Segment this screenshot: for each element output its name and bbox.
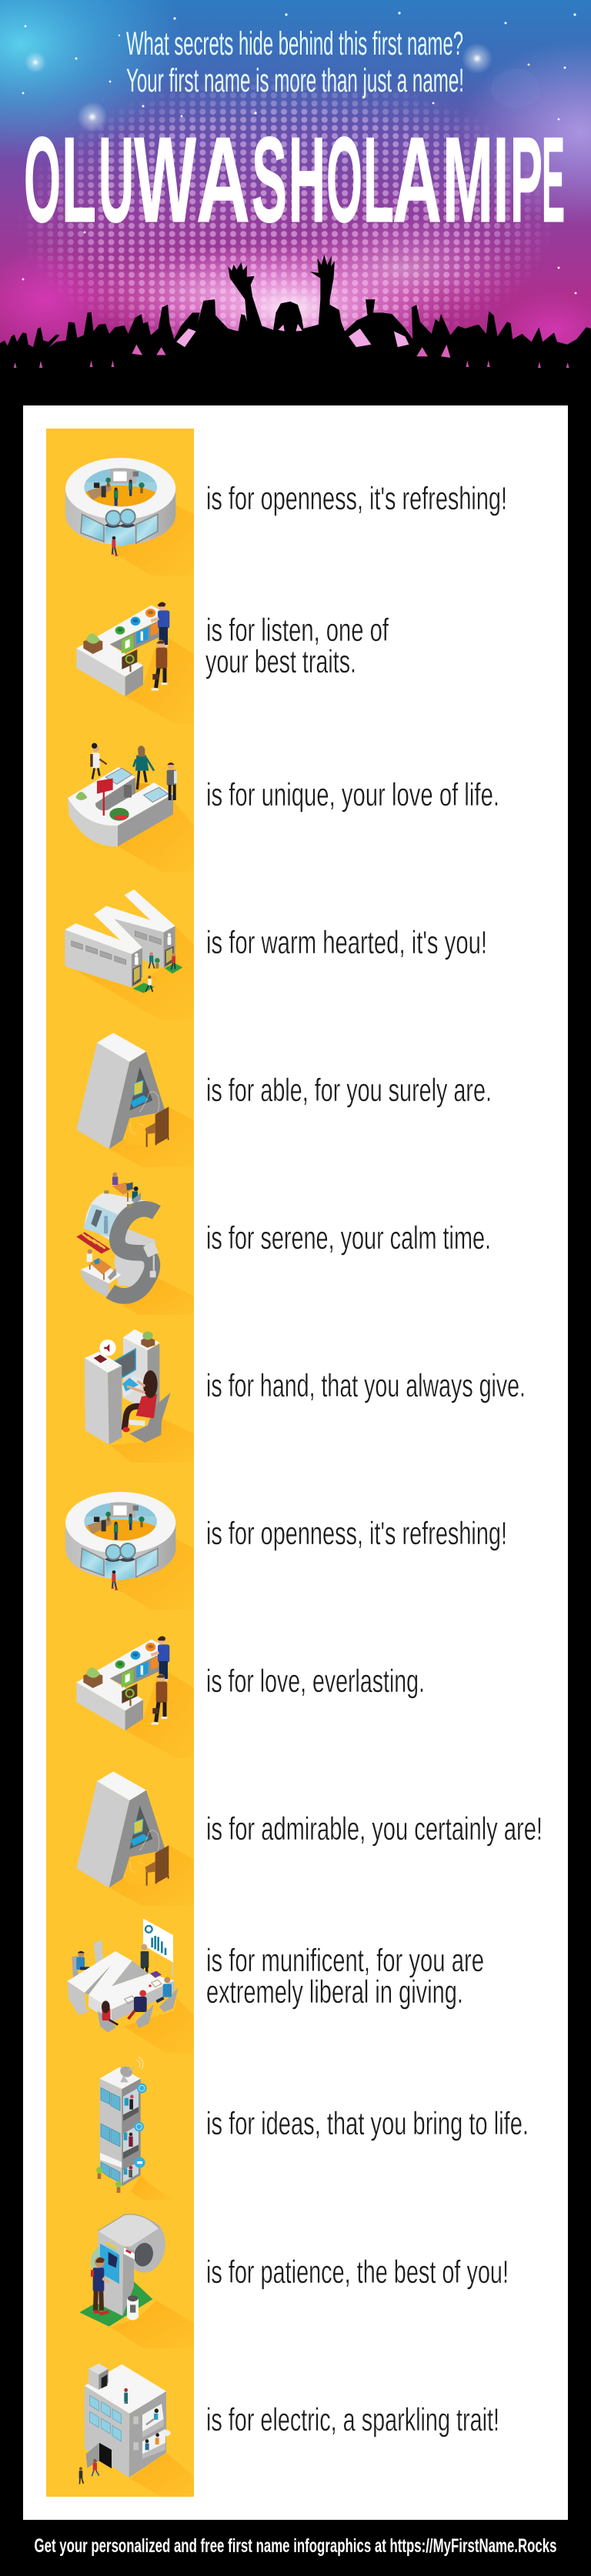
title: first name: H (289, 112, 326, 248)
icon: letter A with chair (76, 1033, 194, 1167)
text: listen (205, 612, 389, 679)
text: listen: your best traits. (205, 643, 356, 679)
row: O openness (65, 458, 507, 576)
text: munificent (206, 1942, 484, 2010)
icon: letter O optician building (65, 458, 194, 576)
title: first name: A (392, 112, 442, 248)
icon: letter L recycling counter (76, 1637, 194, 1759)
row: P patience (79, 2214, 509, 2348)
icon: letter O optician building (65, 1492, 194, 1610)
yellow illustration column (46, 429, 194, 2497)
icon: letter L recycling counter (76, 602, 194, 725)
title: first name: W (134, 112, 196, 248)
title: first name: O (24, 112, 61, 248)
icon: letter H desk worker (85, 1330, 194, 1463)
icon: letter E office building (78, 2364, 192, 2496)
title: first name: L (62, 112, 96, 248)
sparkles (22, 12, 576, 294)
icon: letter W restroom block (65, 889, 194, 1009)
title: first name: A (196, 112, 250, 248)
title: first name (24, 112, 565, 248)
title: first name: I (493, 112, 509, 248)
icon: letter I office tower (96, 2056, 163, 2201)
panel: header concert banner (0, 0, 591, 368)
crowd silhouette (0, 254, 591, 375)
panel: white letter list (23, 405, 568, 2520)
row: H hand (85, 1330, 526, 1463)
row: S serene (76, 1173, 491, 1315)
title: first name: M (442, 112, 493, 248)
text: love: is for love, everlasting. (206, 1663, 425, 1699)
title: first name: U (98, 112, 134, 248)
row: I ideas (96, 2057, 529, 2201)
icon: letter P ATM kiosk (79, 2214, 194, 2348)
row: O openness repeat (65, 1492, 507, 1610)
background: stage lighting gradient (0, 0, 591, 347)
icon: letter S cafe (76, 1173, 192, 1315)
title: first name: O (326, 112, 362, 248)
text: listen: is for listen, one of (206, 612, 389, 648)
icon: letter A with chair (76, 1771, 194, 1906)
row: L love (76, 1637, 425, 1759)
row: L listen (76, 602, 389, 725)
row: M munificent (67, 1918, 484, 2054)
title: first name: P (510, 112, 543, 248)
heading: intro question lines (126, 25, 464, 99)
row: A admirable (76, 1771, 543, 1906)
title: first name: L (363, 112, 394, 248)
row: E electric (79, 2364, 499, 2497)
row: U unique (68, 743, 499, 872)
title: first name: S (252, 112, 287, 248)
text: munificent: extremely liberal in giving. (206, 1974, 463, 2010)
icon: letter U market counter (68, 743, 194, 869)
icon: letter M meeting table (67, 1918, 194, 2050)
row: A able (76, 1033, 492, 1167)
row: W warm hearted (65, 889, 487, 1019)
